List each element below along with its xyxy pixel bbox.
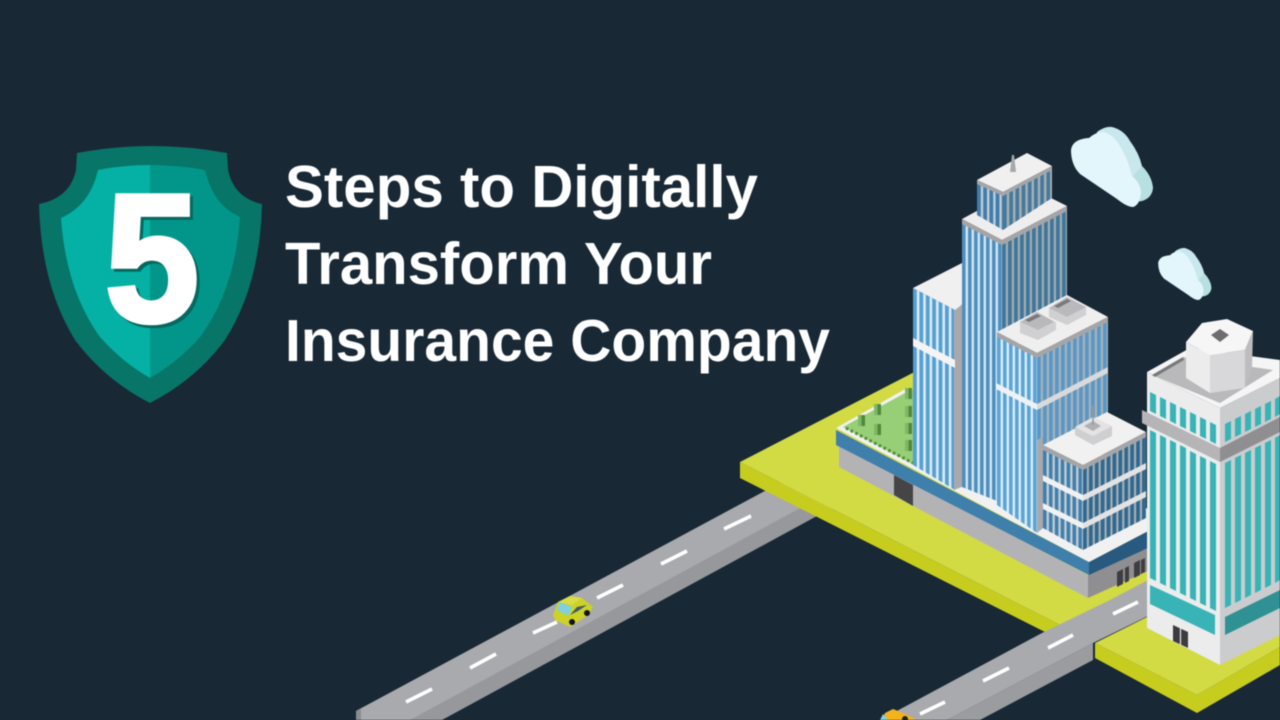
road right (880, 579, 1150, 720)
grey band (1142, 410, 1280, 462)
yellow platform main (740, 364, 1147, 633)
tower centre (996, 295, 1108, 533)
shield outer rim (39, 146, 262, 403)
title line 3: Insurance Company (285, 308, 830, 374)
left long windows (1150, 430, 1216, 611)
base windows (1117, 558, 1145, 587)
base door (894, 475, 913, 506)
number 5: 5 (105, 157, 199, 360)
shield inner left half (61, 165, 150, 378)
title (285, 154, 830, 374)
road left (356, 472, 850, 720)
roof box front (1020, 312, 1056, 340)
car yellow (553, 596, 593, 627)
roof box back (1049, 297, 1086, 325)
car orange (880, 709, 916, 720)
shield inner right half (150, 165, 240, 378)
rooftop garden (843, 388, 914, 465)
cloud small (1158, 248, 1211, 300)
tower top tier (977, 153, 1052, 230)
right long windows (1225, 435, 1280, 608)
shield badge (39, 146, 262, 403)
teal tower (1142, 319, 1280, 665)
roof cap (1186, 319, 1253, 393)
building small (1043, 405, 1146, 550)
garden trees (858, 388, 912, 451)
title line 1: Steps to Digitally (285, 154, 758, 220)
left teal block (1150, 585, 1215, 635)
tower left (913, 262, 964, 490)
yellow platform right (1095, 560, 1280, 713)
cloud large (1071, 127, 1153, 207)
base block (836, 388, 1150, 598)
right teal block (1225, 590, 1280, 635)
number shadow: 5 (108, 160, 202, 363)
left upper windows (1150, 392, 1216, 444)
antenna (1010, 155, 1016, 172)
entrance door (1173, 625, 1188, 648)
tower tall (962, 153, 1067, 503)
small roof box (1075, 405, 1112, 445)
teal roof (1147, 348, 1280, 408)
right upper windows (1225, 396, 1280, 442)
title line 2: Transform Your (285, 231, 712, 297)
